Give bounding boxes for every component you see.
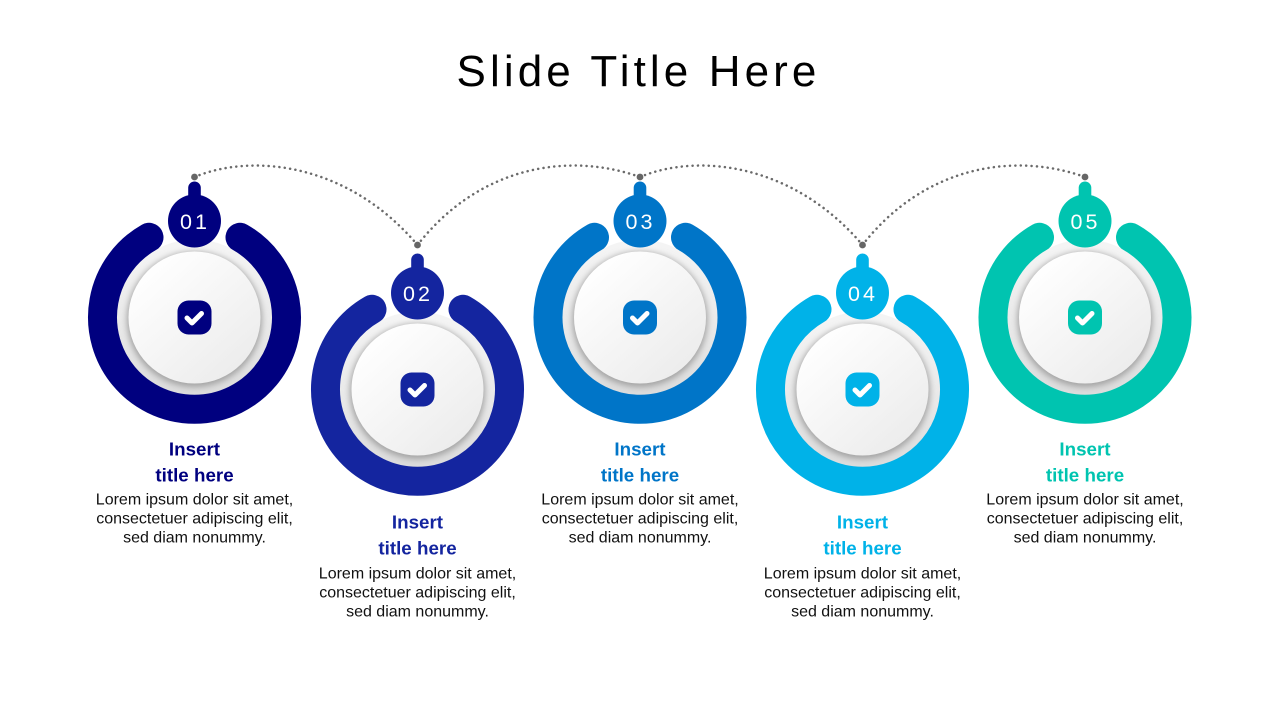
step 5 body text: sed diam nonummy. (1014, 530, 1156, 546)
step 5 body text: Lorem ipsum dolor sit amet, (986, 492, 1184, 508)
step 2 body text: sed diam nonummy. (346, 604, 489, 620)
step 1 body text: consectetuer adipiscing elit, (96, 510, 293, 528)
step 4 grey groove (784, 312, 940, 468)
step 1 heading: Insert (169, 438, 221, 460)
step 4 body text: Lorem ipsum dolor sit amet, (764, 566, 961, 582)
dotted connector arcs (194, 166, 1085, 245)
step 2 check icon (400, 372, 434, 406)
step 5 number: 05 (1071, 210, 1100, 234)
step 2 number: 02 (403, 282, 433, 306)
step 2 (319, 242, 516, 620)
step 5 heading: title here (1046, 464, 1124, 486)
step 2 ring (326, 309, 510, 481)
step 1 connector dot (191, 174, 198, 180)
step 4 heading: title here (823, 538, 902, 558)
step 4 disc shadow (795, 324, 930, 459)
step 2 body text: consectetuer adipiscing elit, (319, 584, 516, 602)
step 1 heading: title here (155, 464, 234, 486)
step 4 ring (770, 309, 954, 481)
step 4 white disc (796, 324, 928, 456)
step 3 body text: Lorem ipsum dolor sit amet, (541, 492, 739, 508)
step 3 check icon (623, 300, 657, 334)
step 4 body text: sed diam nonummy. (791, 604, 934, 620)
step 5 disc shadow (1018, 252, 1152, 387)
step 1 (96, 174, 293, 546)
step 5 check icon (1068, 300, 1102, 334)
step 3 white disc (574, 252, 706, 384)
step 5 ring (993, 237, 1177, 409)
step 5 grey groove (1007, 240, 1163, 396)
step 5 white disc (1019, 252, 1151, 384)
step 1 body text: Lorem ipsum dolor sit amet, (96, 492, 293, 508)
step 1 check icon (178, 300, 212, 334)
step 5 number badge (1058, 182, 1112, 248)
step 2 white disc (352, 324, 484, 456)
step 4 (764, 242, 961, 620)
step 3 connector dot (637, 174, 643, 180)
title: Slide Title Here (457, 47, 820, 96)
step 2 body text: Lorem ipsum dolor sit amet, (319, 566, 516, 582)
step 3 ring (548, 237, 732, 409)
step 3 body text: consectetuer adipiscing elit, (542, 510, 738, 528)
step 4 check icon (846, 372, 880, 406)
step 2 connector dot (414, 242, 421, 248)
step 3 number badge (614, 182, 666, 248)
step 4 connector dot (859, 242, 866, 248)
step 3 number: 03 (626, 210, 655, 234)
step 3 grey groove (562, 240, 718, 396)
step 1 ring (102, 237, 286, 409)
step 4 heading: Insert (837, 512, 889, 532)
step 4 number badge (836, 254, 889, 320)
step 3 heading: title here (601, 464, 679, 486)
step 3 (541, 174, 739, 546)
step 1 number: 01 (180, 210, 210, 234)
step 5 (986, 174, 1184, 546)
step 4 body text: consectetuer adipiscing elit, (764, 584, 961, 602)
step 1 grey groove (116, 240, 272, 396)
step 3 body text: sed diam nonummy. (569, 530, 711, 546)
step 1 number badge (168, 182, 221, 248)
step 5 heading: Insert (1059, 438, 1111, 460)
step 2 heading: Insert (392, 512, 444, 532)
step 1 body text: sed diam nonummy. (123, 530, 266, 546)
step 1 disc shadow (127, 252, 262, 387)
step 2 disc shadow (350, 324, 485, 459)
step 5 body text: consectetuer adipiscing elit, (987, 510, 1183, 528)
step 1 white disc (128, 252, 260, 384)
step 2 heading: title here (378, 538, 457, 558)
step 3 disc shadow (572, 252, 708, 387)
step 5 connector dot (1082, 174, 1088, 180)
step 3 heading: Insert (614, 438, 666, 460)
step 4 number: 04 (848, 282, 878, 306)
step 2 number badge (391, 254, 444, 320)
step 2 grey groove (340, 312, 496, 468)
